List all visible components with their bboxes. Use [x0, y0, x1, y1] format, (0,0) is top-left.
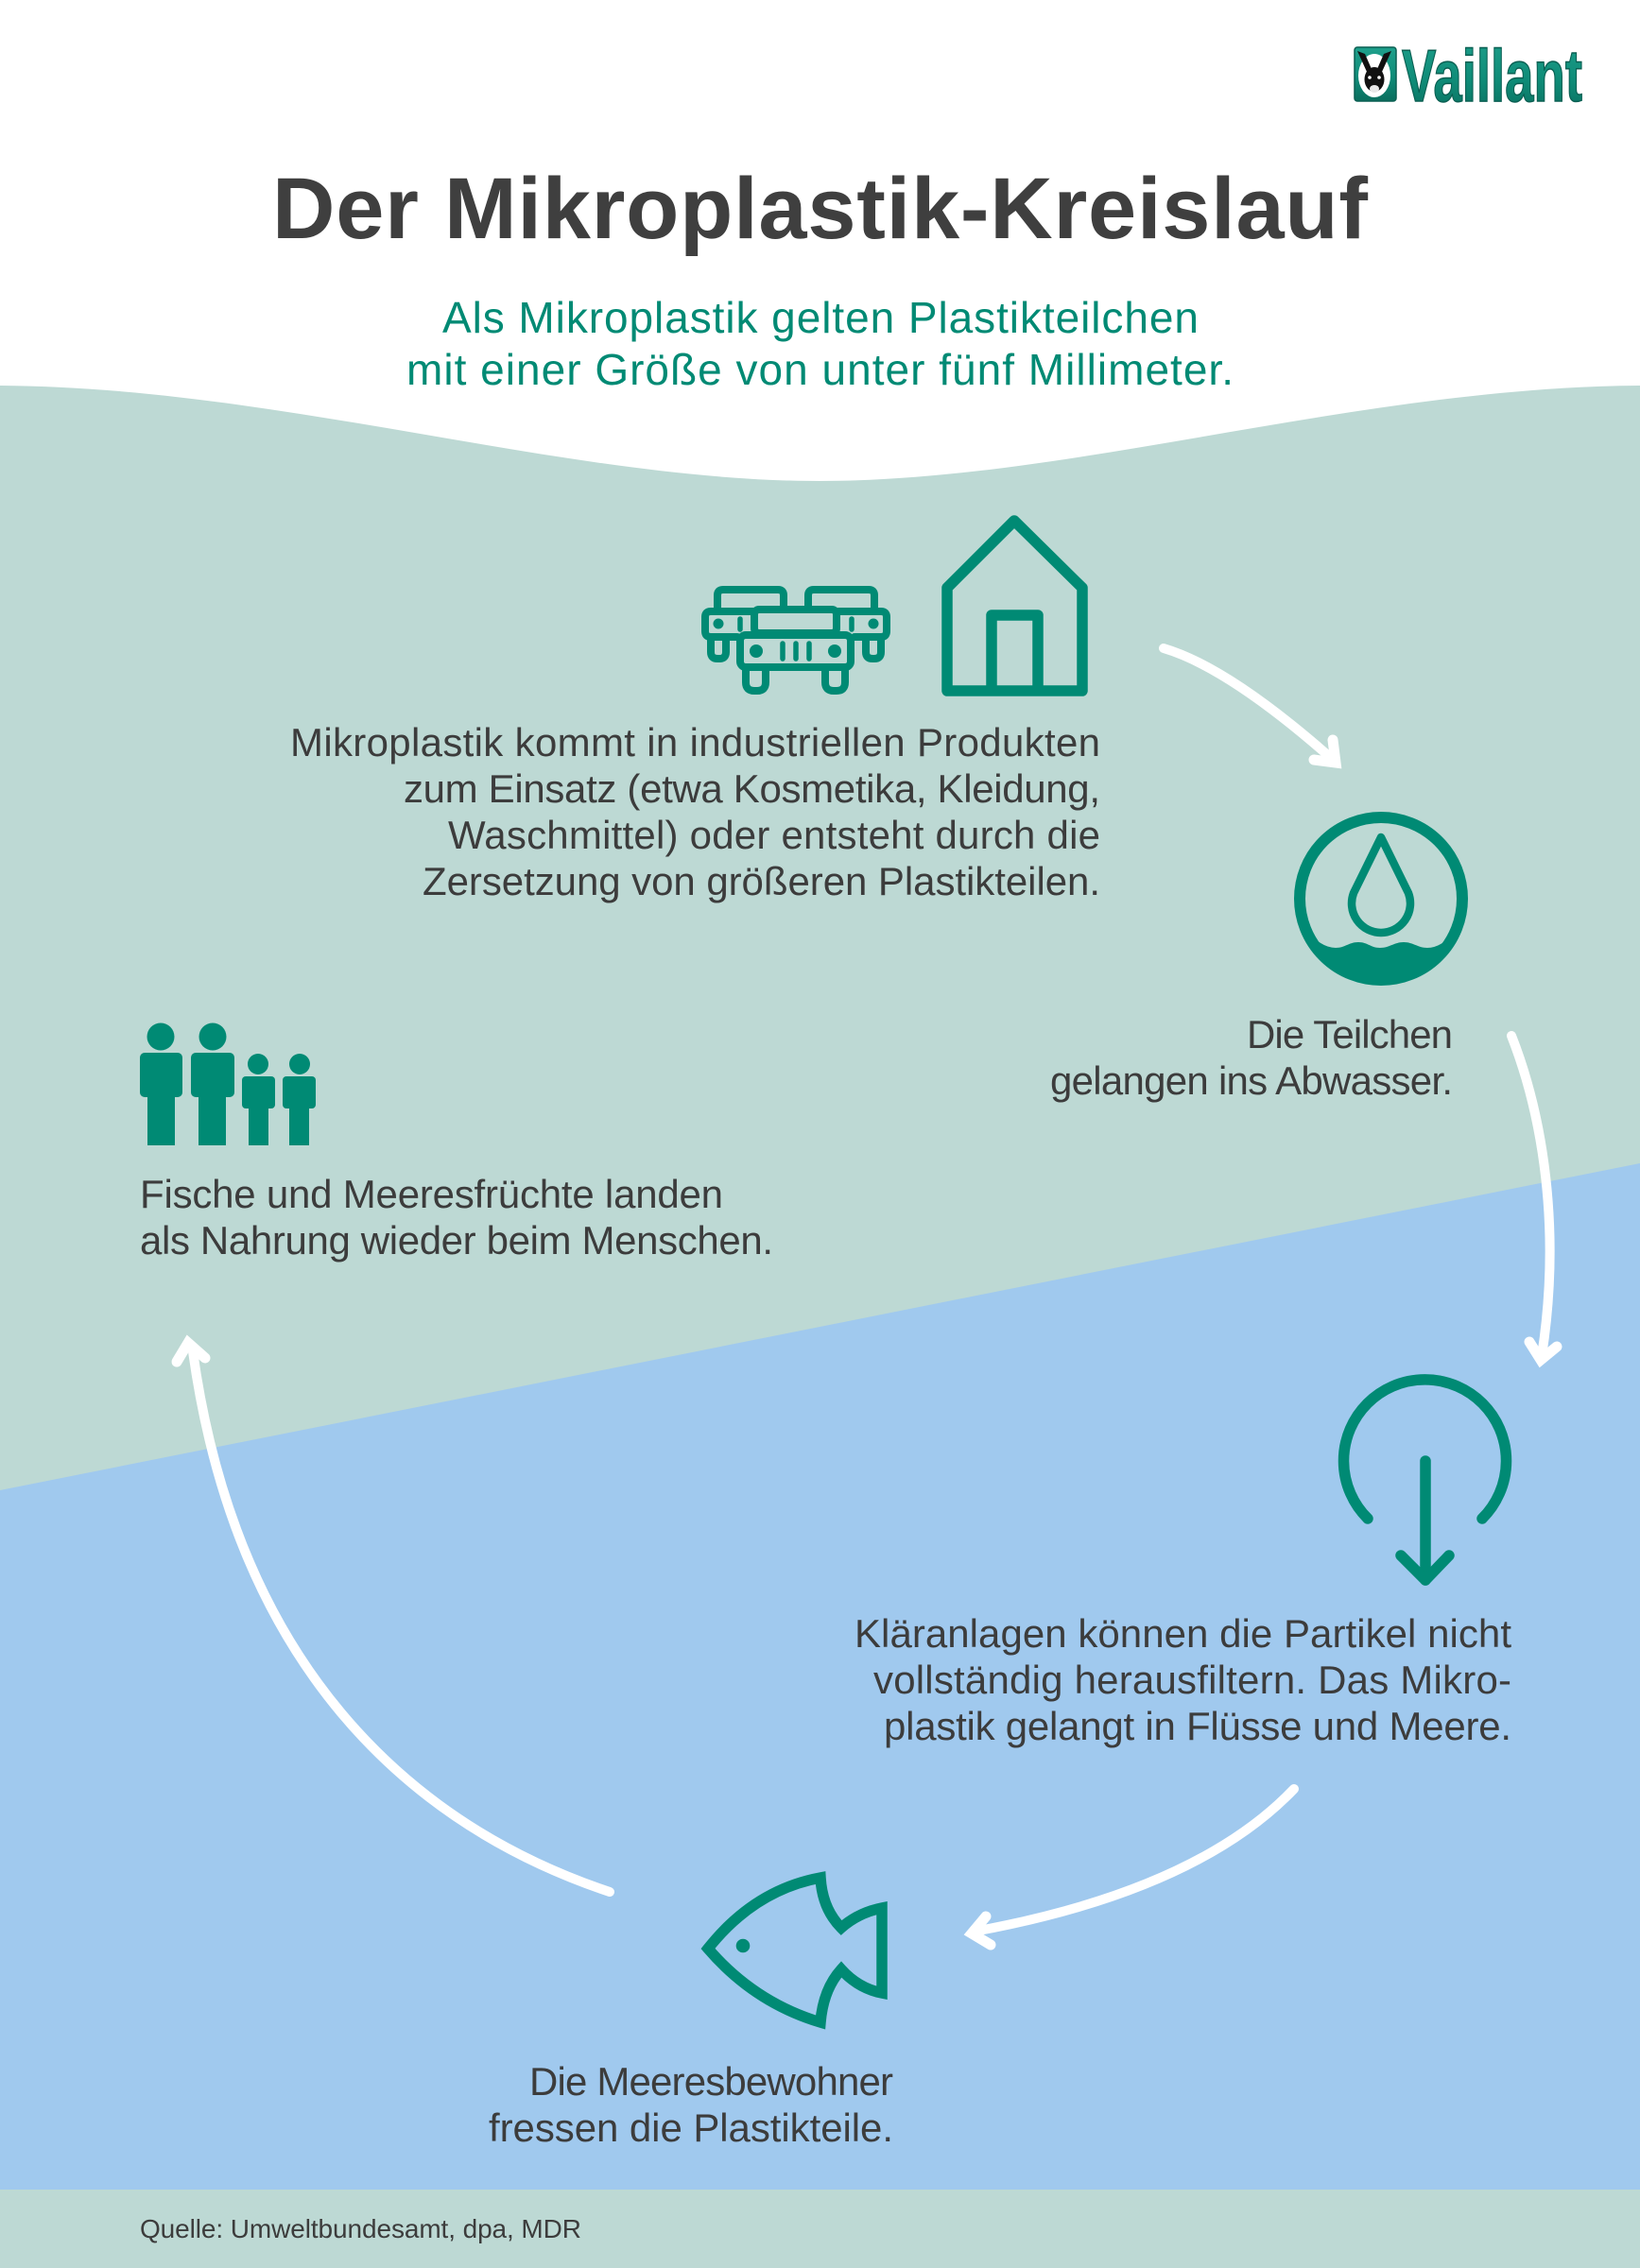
front car — [740, 610, 851, 691]
text: treatment plants: plastik gelangt in Flüsse und Meere. — [884, 1704, 1511, 1748]
icon: house — [947, 521, 1082, 691]
text: industrial products: zum Einsatz (etwa Kosmetika, Kleidung, — [404, 766, 1100, 811]
text: industrial products — [290, 720, 1100, 903]
text: industrial products: Waschmittel) oder entsteht durch die — [448, 813, 1100, 857]
icon: cars — [705, 590, 887, 691]
text: wastewater: Die Teilchen — [1247, 1012, 1453, 1057]
text: food chain — [140, 1172, 773, 1263]
text: food chain: als Nahrung wieder beim Menschen. — [140, 1218, 773, 1263]
text: sea creatures — [489, 2059, 893, 2150]
logo: Vaillant — [1355, 34, 1582, 117]
icon: fish — [708, 1878, 882, 2022]
arrow: treatment to fish — [972, 1789, 1294, 1945]
icon: water drop — [1300, 817, 1462, 985]
text: treatment plants: Kläranlagen können die Partikel nicht — [855, 1611, 1511, 1656]
icon: down arrow — [1343, 1380, 1507, 1580]
arrow: fish to humans — [177, 1343, 610, 1892]
text: sea creatures: Die Meeresbewohner — [529, 2059, 893, 2104]
text: industrial products: Mikroplastik kommt in industriellen Produkten — [290, 720, 1100, 765]
left car — [705, 590, 784, 659]
subtitle: mit einer Größe von unter fünf Millimeter. — [406, 345, 1234, 394]
text: food chain: Fische und Meeresfrüchte landen — [140, 1172, 723, 1216]
text: treatment plants — [855, 1611, 1511, 1748]
panel: source footer — [0, 2190, 1640, 2268]
subtitle — [406, 293, 1234, 394]
arrow: products to wastewater — [1164, 648, 1336, 763]
title: Der Mikroplastik-Kreislauf — [272, 161, 1368, 257]
subtitle: Als Mikroplastik gelten Plastikteilchen — [442, 293, 1199, 342]
text: sea creatures: fressen die Plastikteile. — [489, 2105, 893, 2150]
panel: blue water background — [0, 1163, 1640, 2190]
text: wastewater: gelangen ins Abwasser. — [1050, 1058, 1453, 1103]
text: treatment plants: vollständig herausfiltern. Das Mikro- — [873, 1658, 1511, 1702]
panel: source footer: Quelle: Umweltbundesamt, dpa, MDR — [140, 2214, 581, 2243]
text: industrial products: Zersetzung von größeren Plastikteilen. — [423, 859, 1100, 903]
text: wastewater — [1050, 1012, 1453, 1103]
right car — [808, 590, 887, 659]
arrow: wastewater to treatment — [1511, 1036, 1557, 1360]
icon: people — [140, 1022, 316, 1145]
